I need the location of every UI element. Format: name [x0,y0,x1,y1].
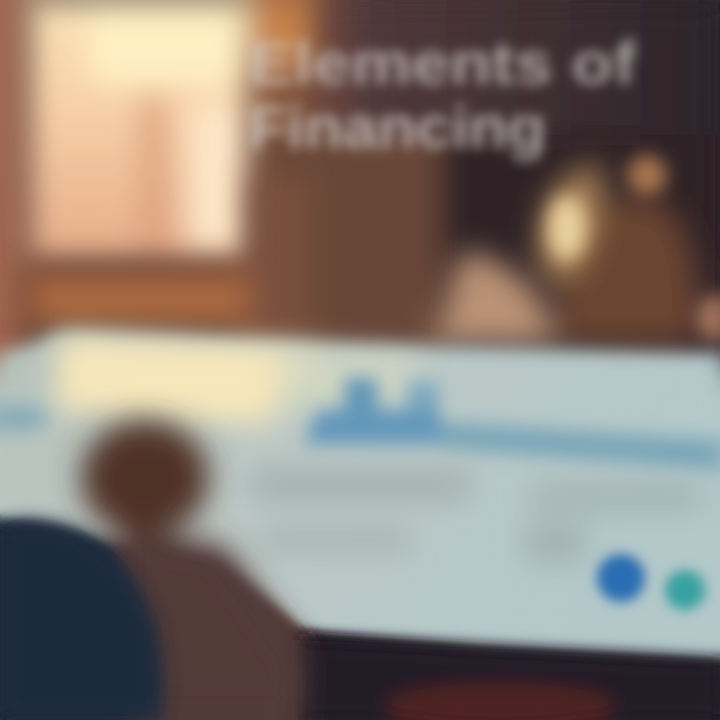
foreground: table edge [300,640,720,720]
figure: highlights [548,155,720,340]
document: pale sheet on the table [0,330,720,652]
foreground: navy shoulder [0,521,163,720]
icon: teal circle [665,570,705,610]
figure: blurred plush shape [425,165,698,345]
document: blue heading [0,378,720,470]
background: bright window [28,0,310,262]
icon: blue circle [597,554,645,602]
document: warm light patch [55,335,420,425]
heading: blurred title: Financing [248,94,546,161]
foreground: blurred person [81,420,305,720]
heading: blurred title: Elements of [248,30,637,97]
background: room wall [0,0,720,370]
background: window sill [25,175,310,340]
heading: blurred title [248,30,637,161]
document: faint text columns [250,470,700,560]
